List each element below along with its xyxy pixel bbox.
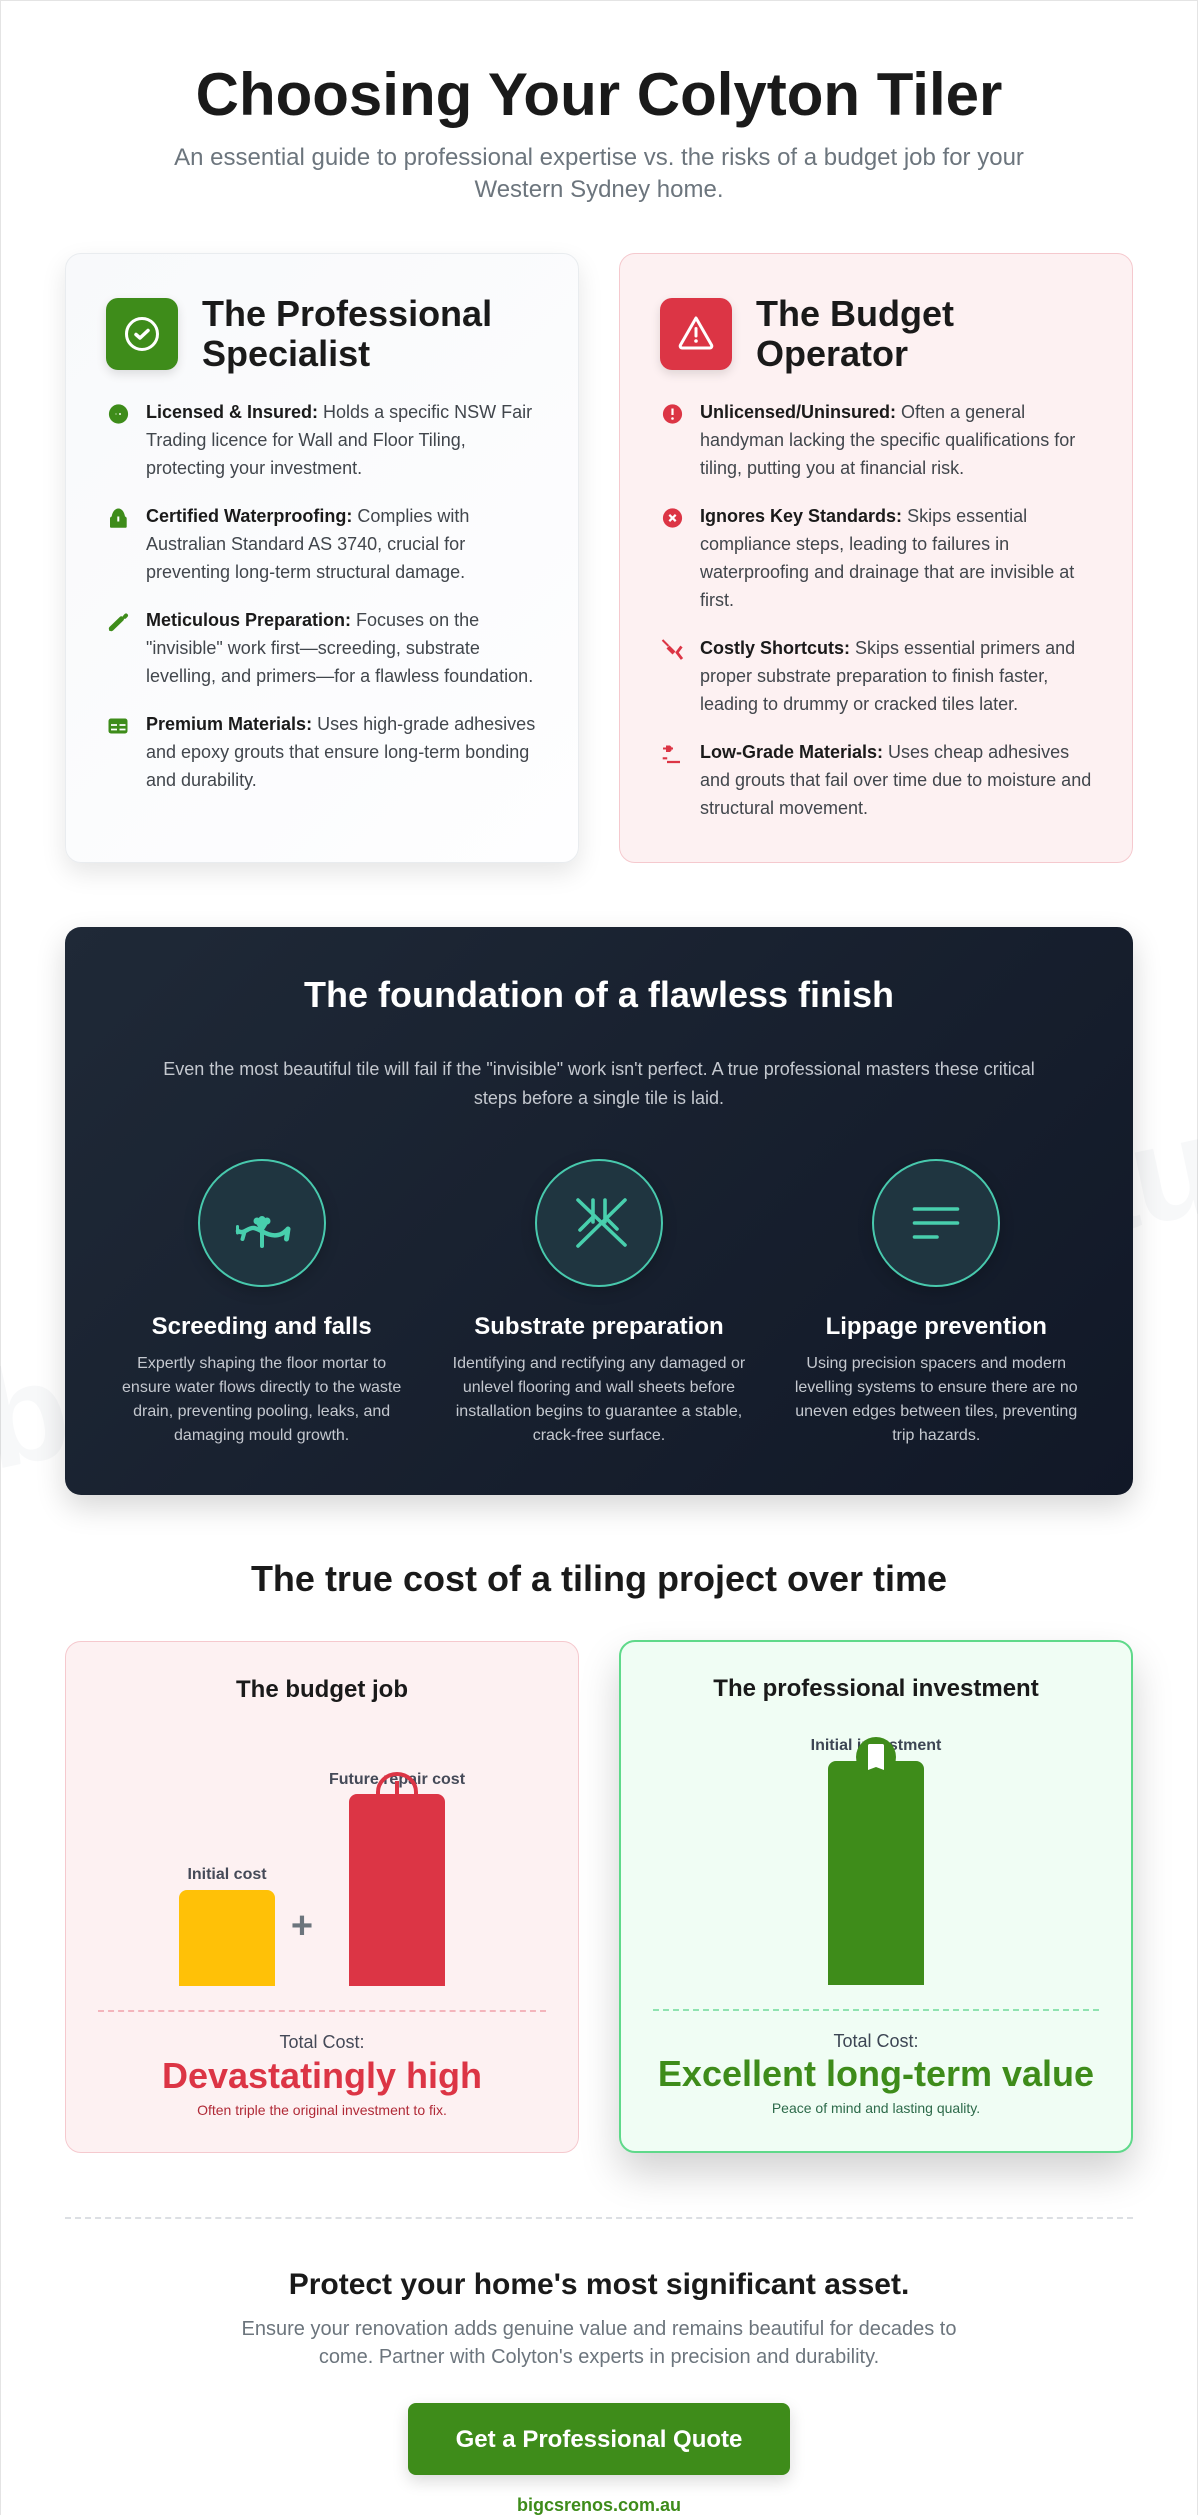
- panel: the professional specialist: [65, 253, 579, 862]
- button: get a quote: Get a Professional Quote: [456, 2426, 742, 2453]
- panel: the foundation of a flawless finish: [65, 927, 1133, 1495]
- heading: budget: The Budget: [756, 293, 954, 334]
- bar chart: budget: [179, 1770, 465, 1986]
- step text: Identifying and rectifying any damaged or: [453, 1354, 745, 1372]
- subtitle: An essential guide to professional expertise vs. the risks of a budget job for your: [174, 144, 1024, 171]
- text: unlicensed: handyman lacking the specific qualifications for: [700, 430, 1075, 450]
- heading: call to action: Protect your home's most significant asset.: [289, 2268, 909, 2301]
- label: future repair cost: Future repair cost: [329, 1770, 465, 1788]
- intro paragraph: [163, 1059, 1035, 1108]
- step text: [453, 1354, 745, 1444]
- bar: initial cost: [179, 1890, 275, 1986]
- step: screeding and falls: [122, 1159, 401, 1444]
- icon: lock: [110, 508, 127, 528]
- call to action text: Ensure your renovation adds genuine value and remains beautiful for decades to: [242, 2318, 956, 2340]
- text: certified waterproofing: preventing long-term structural damage.: [146, 562, 465, 582]
- text: meticulous preparation: "invisible" work first—screeding, substrate: [146, 638, 480, 658]
- heading: true cost: The true cost of a tiling project over time: [251, 1558, 947, 1598]
- step text: trip hazards.: [892, 1426, 980, 1444]
- step text: levelling systems to ensure there are no: [795, 1378, 1078, 1396]
- text: meticulous preparation: levelling, and primers—for a flawless foundation.: [146, 666, 533, 686]
- panel: the professional investment: [619, 1640, 1133, 2153]
- step heading: Screeding and falls: [152, 1313, 372, 1340]
- step text: damaging mould growth.: [174, 1426, 349, 1444]
- plus sign: +: [291, 1905, 313, 1947]
- heading: professional: Specialist: [202, 333, 370, 374]
- step text: Using precision spacers and modern: [806, 1354, 1066, 1372]
- text: licensed and insured: Trading licence for Wall and Floor Tiling,: [146, 430, 466, 450]
- heading: foundation: The foundation of a flawless finish: [304, 974, 894, 1015]
- text: ignores key standards: [700, 506, 1074, 610]
- text: ignores key standards: compliance steps, leading to failures in: [700, 534, 1009, 554]
- text: meticulous preparation: Meticulous Preparation: Focuses on the: [146, 610, 479, 630]
- text: costly shortcuts: [700, 638, 1075, 714]
- text: premium materials: and durability.: [146, 770, 257, 790]
- title: Choosing Your Colyton Tiler: [196, 60, 1002, 128]
- subtitle: Western Sydney home.: [474, 176, 724, 203]
- total cost label: Total Cost:: [279, 2032, 365, 2052]
- text: low-grade materials: structural movement.: [700, 798, 868, 818]
- heading: professional: [202, 293, 492, 374]
- text: low-grade materials: Low-Grade Materials: Uses cheap adhesives: [700, 742, 1069, 762]
- heading: budget: Operator: [756, 333, 908, 374]
- bar chart: professional: [811, 1737, 942, 1985]
- icon: cross circle: [662, 508, 682, 528]
- text: certified waterproofing: Australian Standard AS 3740, crucial for: [146, 534, 465, 554]
- text: low-grade materials: and grouts that fail over time due to moisture and: [700, 770, 1091, 790]
- step text: unlevel flooring and wall sheets before: [463, 1378, 735, 1396]
- step text: [795, 1354, 1078, 1444]
- dashed divider: [98, 2010, 546, 2012]
- text: licensed and insured: protecting your investment.: [146, 458, 362, 478]
- verdict: excellent long-term value: Excellent long-term value: [658, 2053, 1094, 2094]
- text: licensed and insured: Licensed & Insured: Holds a specific NSW Fair: [146, 402, 532, 422]
- icon: exclamation circle: [662, 404, 682, 424]
- text: meticulous preparation: [146, 610, 533, 686]
- text: ignores key standards: waterproofing and drainage that are invisible at: [700, 562, 1074, 582]
- text: costly shortcuts: proper substrate preparation to finish faster,: [700, 666, 1048, 686]
- website link: bigcsrenos.com.au: [517, 2494, 681, 2514]
- text: premium materials: Premium Materials: Uses high-grade adhesives: [146, 714, 535, 734]
- step text: uneven edges between tiles, preventing: [795, 1402, 1077, 1420]
- label: initial cost: Initial cost: [187, 1866, 267, 1883]
- text: ignores key standards: first.: [700, 590, 734, 610]
- step text: [122, 1354, 401, 1444]
- icon: warning triangle: [660, 298, 732, 370]
- icon: materials table: [108, 718, 128, 734]
- icon: low grade layers: [662, 746, 680, 764]
- text: costly shortcuts: leading to drummy or cracked tiles later.: [700, 694, 1018, 714]
- step text: installation begins to guarantee a stable,: [456, 1402, 742, 1420]
- icon: shield check: [106, 298, 178, 370]
- text: unlicensed: tiling, putting you at financial risk.: [700, 458, 964, 478]
- text: low-grade materials: [700, 742, 1091, 818]
- step text: ensure water flows directly to the waste: [122, 1378, 401, 1396]
- step text: Expertly shaping the floor mortar to: [137, 1354, 386, 1372]
- heading: professional: The Professional: [202, 293, 492, 334]
- subtitle: [174, 144, 1024, 203]
- total cost label: Total Cost:: [833, 2030, 919, 2050]
- text: unlicensed: [700, 402, 1075, 478]
- icon: bookmark tab: [856, 1737, 896, 1770]
- button: get a quote: [408, 2403, 790, 2475]
- step heading: Lippage prevention: [826, 1313, 1047, 1340]
- step text: crack-free surface.: [533, 1426, 665, 1444]
- text: unlicensed: Unlicensed/Uninsured: Often a general: [700, 402, 1025, 422]
- card title: The budget job: [236, 1676, 408, 1703]
- icon: screed trowel: [198, 1159, 326, 1287]
- step heading: Substrate preparation: [474, 1313, 724, 1340]
- step: substrate preparation: [453, 1159, 745, 1444]
- call to action text: [242, 2318, 956, 2368]
- icon: lines: [872, 1159, 1000, 1287]
- bar: initial investment: [828, 1761, 924, 1985]
- dashed divider: [653, 2009, 1099, 2011]
- step text: drain, preventing pooling, leaks, and: [133, 1402, 390, 1420]
- panel: the budget operator: [619, 253, 1133, 862]
- text: licensed and insured: [146, 402, 532, 478]
- icon: pencil: [108, 613, 128, 632]
- step: lippage prevention: [795, 1159, 1078, 1444]
- bar: future repair cost: [349, 1794, 445, 1986]
- intro paragraph: steps before a single tile is laid.: [474, 1088, 724, 1108]
- call to action text: come. Partner with Colyton's experts in precision and durability.: [319, 2346, 879, 2368]
- note: Often triple the original investment to fix.: [197, 2102, 447, 2118]
- text: premium materials: and epoxy grouts that ensure long-term bonding: [146, 742, 529, 762]
- verdict: devastatingly high: Devastatingly high: [162, 2054, 482, 2096]
- text: premium materials: [146, 714, 535, 790]
- label: initial investment: Initial investment: [811, 1737, 941, 1754]
- panel: the budget job: [65, 1641, 579, 2153]
- note: Peace of mind and lasting quality.: [772, 2100, 980, 2116]
- icon: repair handle: [376, 1772, 418, 1794]
- intro paragraph: Even the most beautiful tile will fail if the "invisible" work isn't perfect. A true professional masters these critical: [163, 1059, 1035, 1079]
- footer divider: [65, 2217, 1133, 2219]
- heading: budget: [756, 293, 954, 374]
- text: certified waterproofing: Certified Waterproofing: Complies with: [146, 506, 469, 526]
- text: costly shortcuts: Costly Shortcuts: Skips essential primers and: [700, 638, 1075, 658]
- icon: broken shortcut: [662, 639, 684, 660]
- text: ignores key standards: Ignores Key Standards: Skips essential: [700, 506, 1027, 526]
- card title: The professional investment: [713, 1675, 1039, 1702]
- text: certified waterproofing: [146, 506, 469, 582]
- icon: crossed tools: [535, 1159, 663, 1287]
- icon: licence badge: [108, 404, 128, 424]
